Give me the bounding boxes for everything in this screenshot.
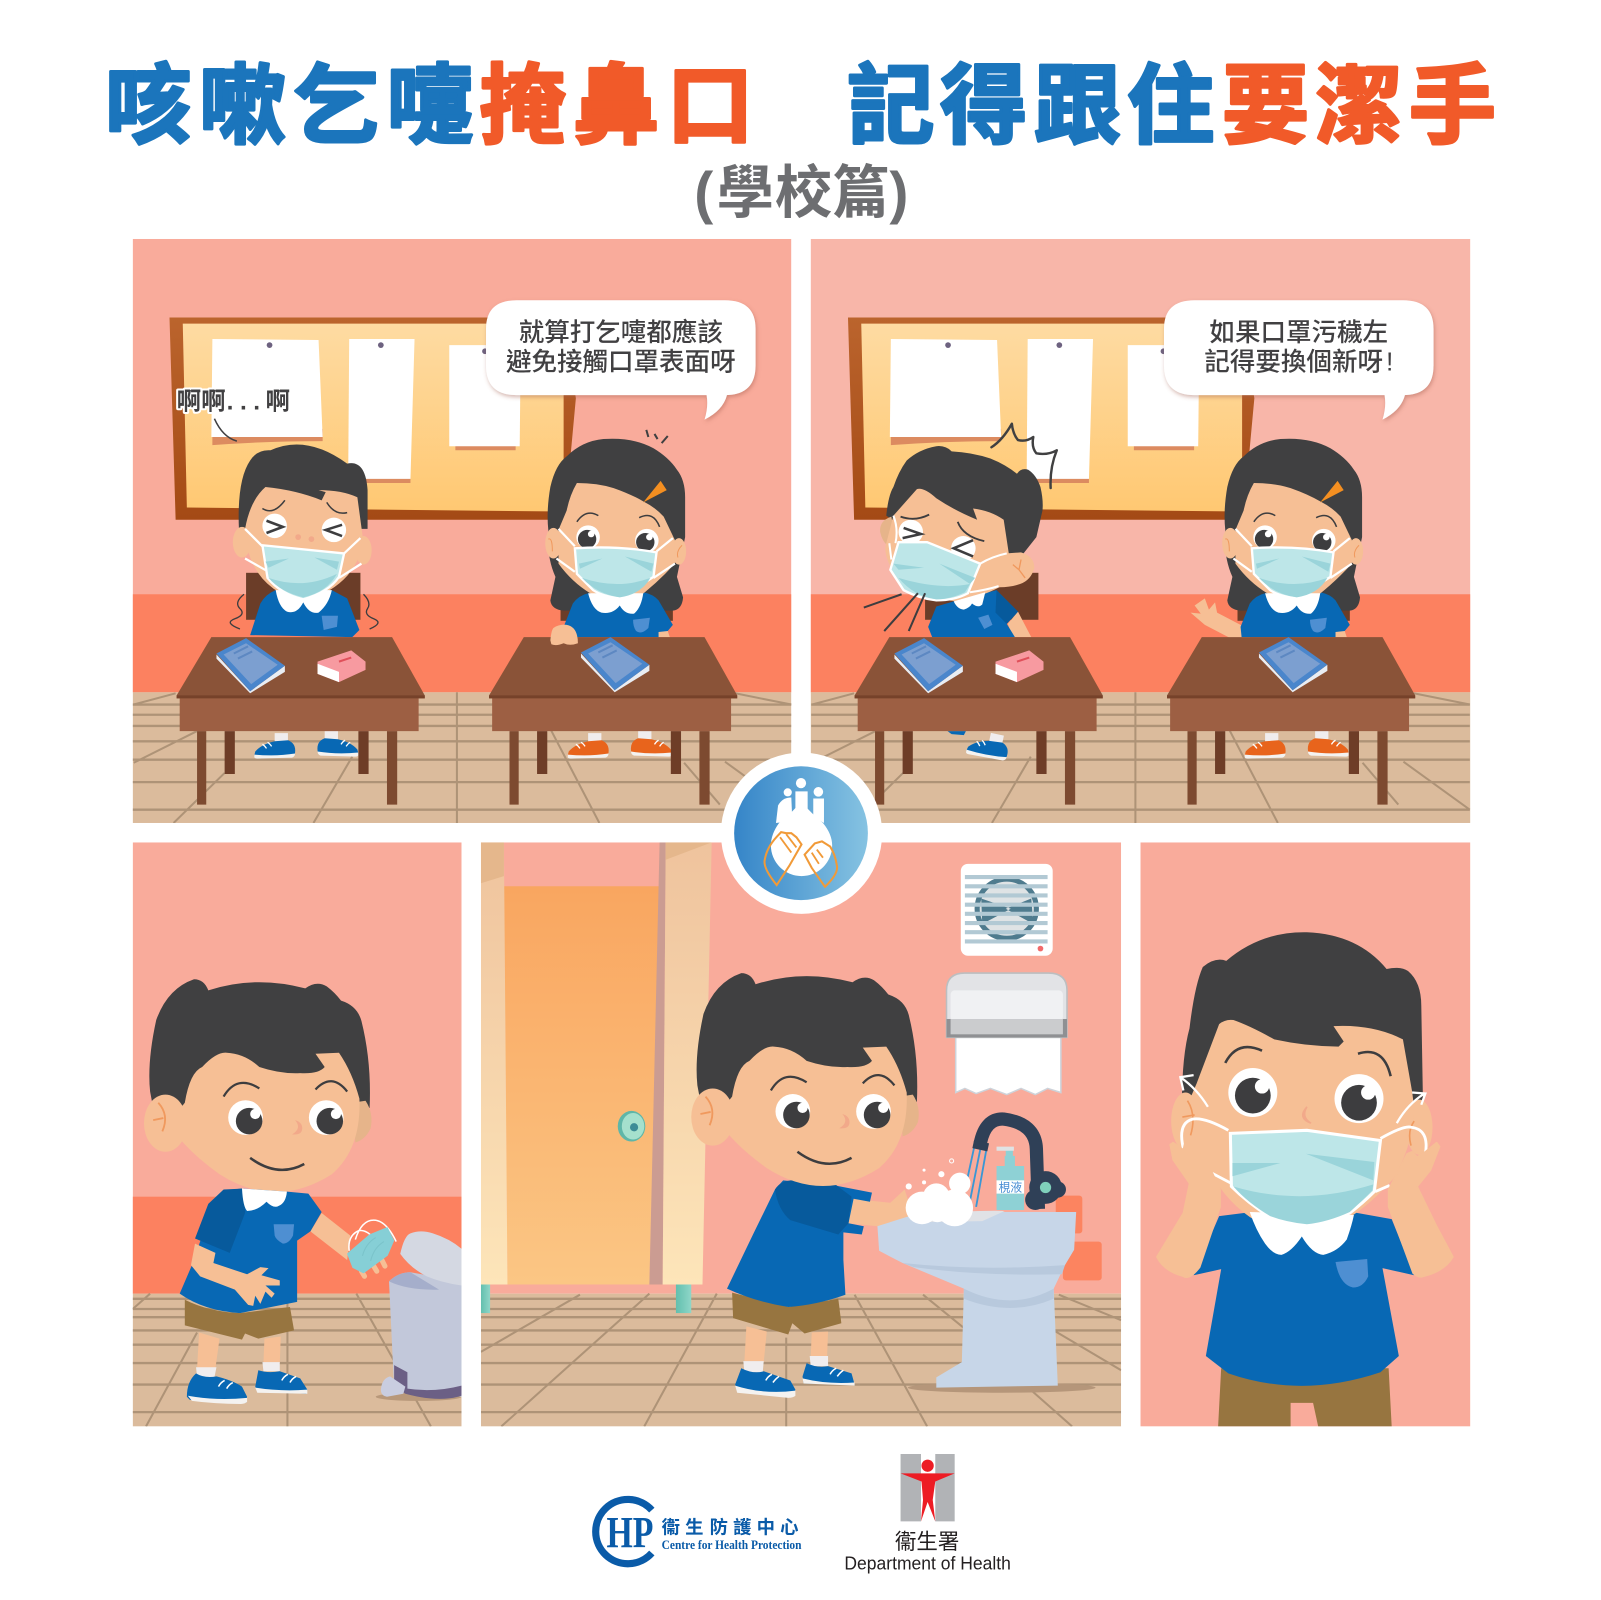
panel: classroom change soiled mask	[811, 239, 1470, 823]
icon: hand hygiene emblem	[721, 753, 882, 914]
desk right	[1167, 637, 1415, 805]
door stall	[481, 842, 712, 1313]
boy ears	[1171, 1093, 1433, 1155]
logo: Department of Health: 衞生署	[895, 1530, 959, 1554]
book: pink box	[996, 650, 1044, 682]
sink	[877, 1211, 1096, 1393]
speech bubble	[1164, 300, 1434, 420]
panel: throw used mask in bin	[133, 842, 462, 1426]
boy shirt	[727, 1180, 913, 1307]
shoes	[948, 731, 1349, 760]
title line 1: 掩鼻口	[480, 58, 754, 155]
soap bottle	[997, 1147, 1024, 1210]
sound text: sneeze: 啊啊...啊	[177, 388, 290, 415]
logo: Centre for Health Protection: HP	[607, 1509, 653, 1557]
logo: Centre for Health Protection: Centre for Health Protection	[662, 1538, 802, 1552]
collar	[1250, 1212, 1354, 1255]
bulletin board	[848, 318, 1254, 520]
boy: arm reaching	[310, 1213, 350, 1260]
shoes under desks	[254, 731, 672, 759]
boy: legs and shoes	[187, 1332, 307, 1404]
speech bubble: 記得要換個新呀!	[1204, 349, 1393, 377]
wainscot	[811, 594, 1470, 692]
boy: shorts	[185, 1300, 294, 1340]
left hand	[1157, 1143, 1220, 1277]
speech bubble: 避免接觸口罩表面呀	[506, 349, 736, 377]
mask	[1230, 1130, 1380, 1225]
boy head	[144, 979, 371, 1192]
sneeze droplet lines	[864, 593, 925, 631]
title line 2: 要潔手	[1222, 58, 1496, 155]
boy shirt	[1194, 1212, 1414, 1386]
wall	[1141, 842, 1470, 1426]
wall	[133, 842, 462, 1294]
boy shorts	[1218, 1368, 1392, 1426]
bin	[376, 1231, 462, 1401]
girl's hand on desk	[550, 625, 578, 645]
title line 2	[847, 58, 1496, 155]
title line 2: 記得跟住	[847, 58, 1214, 155]
student: boy turning aside to sneeze	[880, 446, 1043, 637]
faucet water	[964, 1148, 986, 1207]
wall tiles	[1056, 1196, 1102, 1280]
logo: Centre for Health Protection: 衞生防護中心	[662, 1517, 798, 1538]
student: girl	[545, 430, 686, 637]
boy ear creases	[1182, 1101, 1414, 1146]
book: pink box	[318, 650, 366, 682]
title line 1	[105, 58, 754, 155]
speech bubble: 就算打乞嚏都應該	[519, 318, 723, 347]
desk right	[489, 637, 737, 805]
student: girl waving	[1191, 439, 1363, 638]
logo: Department of Health	[844, 1454, 1011, 1573]
subtitle: (學校篇)	[694, 161, 908, 225]
speech bubble: 如果口罩污穢左	[1209, 319, 1388, 347]
boy: arm on belly	[191, 1244, 280, 1306]
wall	[133, 239, 791, 692]
panel: wash hands at sink	[481, 842, 1121, 1426]
book	[894, 638, 963, 693]
faucet	[972, 1119, 1066, 1210]
boy face	[1178, 1020, 1414, 1235]
bulletin board	[169, 318, 576, 520]
speech bubble	[486, 300, 756, 420]
boy head	[691, 973, 919, 1186]
panel: classroom student sneezes into mask	[133, 239, 791, 823]
paper towel dispenser	[947, 973, 1067, 1095]
floor	[133, 692, 791, 823]
logo: Centre for Health Protection	[596, 1499, 802, 1564]
icon: people	[776, 778, 824, 823]
panel: put on new mask	[1141, 842, 1470, 1426]
used mask in hand	[348, 1220, 396, 1276]
wall	[811, 239, 1470, 692]
boy eyes	[1225, 1047, 1391, 1123]
boy shorts	[732, 1293, 841, 1335]
right hand	[1389, 1143, 1453, 1277]
vent fan	[961, 864, 1053, 956]
arrows and ear straps	[1180, 1075, 1426, 1192]
soap bottle: 梘液	[999, 1181, 1022, 1195]
boy: shirt	[180, 1189, 322, 1313]
wainscot	[133, 594, 791, 692]
logo: Department of Health: Department of Health	[844, 1552, 1011, 1573]
icon: hands	[765, 832, 837, 887]
boy legs and shoes	[735, 1326, 855, 1398]
soap foam	[906, 1159, 973, 1226]
wall	[481, 842, 1121, 1294]
sound mark: sneeze burst	[991, 424, 1057, 488]
door knob	[618, 1111, 645, 1142]
book right desk	[581, 637, 649, 692]
book	[216, 638, 285, 693]
title line 1: 咳嗽乞嚏	[105, 58, 474, 155]
student: boy with closed eyes	[230, 444, 378, 637]
icon: water drop	[771, 802, 832, 876]
title	[105, 58, 1496, 155]
desk left	[177, 637, 425, 805]
desk left	[855, 637, 1103, 805]
book right desk	[1259, 637, 1327, 692]
boy hair	[1182, 932, 1423, 1123]
floor	[133, 1294, 462, 1426]
floor	[481, 1294, 1121, 1426]
floor	[811, 692, 1470, 823]
wainscot	[133, 1197, 462, 1294]
sound text: sneeze	[177, 388, 290, 441]
